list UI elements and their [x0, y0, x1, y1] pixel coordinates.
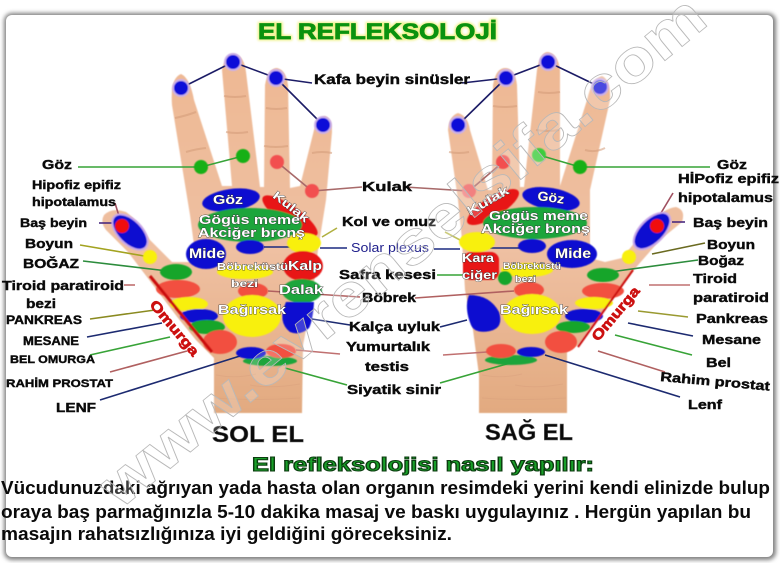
labels: left side: Tiroid paratiroid	[2, 278, 124, 293]
instructions text block: oraya baş parmağınızla 5-10 dakika masaj ve baskı uygulayınız . Hergün yapılan bu	[1, 502, 751, 522]
labels: center: Kol ve omuz	[342, 214, 437, 229]
palm zone labels: Akciğer bronş	[481, 221, 590, 236]
labels: left side: PANKREAS	[6, 313, 82, 327]
labels: center: Safra kesesi	[339, 267, 436, 282]
labels: left side: RAHİM PROSTAT	[6, 377, 113, 390]
right hand illustration	[405, 52, 710, 413]
labels: left side: BEL OMURGA	[10, 354, 95, 366]
palm zone labels: Mide	[189, 245, 225, 261]
labels: right side: Pankreas	[696, 311, 768, 326]
palm zone labels: Omurga	[147, 297, 203, 359]
labels: left side: Hipofiz epifiz	[32, 178, 121, 192]
labels: center: Yumurtalık	[346, 339, 431, 354]
labels: left side: hipotalamus	[32, 195, 116, 209]
palm zone labels: Böbreküstü	[217, 261, 288, 273]
palm zone labels: Mide	[555, 245, 591, 261]
palm zone labels: Kara	[462, 251, 494, 265]
palm zone labels: Gögüs meme	[199, 212, 300, 227]
palm zone labels	[147, 188, 324, 359]
labels: right side	[660, 157, 780, 412]
labels: center: Solar plexus	[351, 241, 429, 255]
labels: right side: paratiroid	[693, 290, 769, 305]
labels: left side: BOĞAZ	[23, 256, 79, 271]
labels: left side: MESANE	[23, 334, 79, 348]
labels: right side: HİPofiz epifiz	[678, 171, 780, 186]
labels: right side: Göz	[717, 157, 748, 172]
title: EL REFLEKSOLOJİ	[258, 19, 497, 44]
watermark: www.evrenselsifa.com	[85, 0, 719, 521]
palm zone labels: ciğer	[462, 268, 497, 282]
palm zone labels: Gögüs meme	[489, 208, 588, 223]
palm zone labels	[462, 182, 643, 344]
heading: left hand: SOL EL	[212, 421, 304, 447]
palm zone labels: Kulak	[464, 182, 512, 219]
labels: center: Kalça uyluk	[349, 319, 441, 334]
left hand illustration	[78, 53, 362, 413]
labels: left side: Baş beyin	[20, 216, 87, 230]
palm zone labels: Göz	[537, 188, 566, 207]
palm zone labels: Omurga	[588, 283, 643, 344]
labels: right side: hipotalamus	[678, 190, 773, 205]
palm zone labels: Bağırsak	[218, 302, 287, 317]
finger creases	[449, 92, 605, 400]
instructions text block: masajın rahatsızlığınıza iyi geldiğini göreceksiniz.	[1, 524, 452, 544]
palm zone labels: Bağırsak	[500, 302, 569, 317]
labels: right side: Boyun	[707, 237, 755, 252]
reflex points	[105, 53, 332, 366]
palm zone labels: Kalp	[288, 258, 322, 273]
labels: right side: Mesane	[702, 332, 761, 347]
labels: center	[314, 72, 471, 397]
labels: right side: Rahim prostat	[660, 369, 771, 394]
palm zone labels: Göz	[213, 192, 244, 207]
labels: right side: Bel	[706, 355, 731, 370]
labels: right side: Lenf	[688, 397, 723, 412]
labels: left side: LENF	[56, 400, 96, 415]
title: EL REFLEKSOLOJİ	[258, 19, 497, 44]
palm zone labels: Böbreküstü	[503, 261, 561, 272]
labels: center: Siyatik sinir	[347, 382, 441, 397]
connector lines	[78, 62, 362, 400]
labels: left side: Göz	[42, 157, 73, 172]
palm zone labels: bezi	[515, 274, 536, 285]
finger creases	[175, 96, 332, 400]
palm zone labels: Akciğer bronş	[198, 225, 305, 240]
labels: right side: Baş beyin	[693, 215, 768, 230]
labels: left side: Boyun	[25, 236, 73, 251]
labels: right side: Boğaz	[698, 253, 745, 268]
connector lines	[405, 62, 710, 397]
reflex points	[449, 53, 678, 365]
subheading: El refleksolojisi nasıl yapılır:	[252, 455, 594, 476]
labels: center: testis	[365, 359, 409, 374]
palm zone labels: Dalak	[279, 282, 324, 297]
palm zone labels: bezi	[231, 278, 258, 290]
labels: center: Kulak	[362, 179, 413, 194]
labels: left side	[2, 157, 124, 415]
heading: right hand: SAĞ EL	[485, 418, 573, 445]
labels: left side: bezi	[26, 296, 56, 311]
instructions text block: Vücudunuzdaki ağrıyan yada hasta olan organın resimdeki yerini kendi elinizde bulup	[1, 478, 770, 498]
labels: right side: Tiroid	[693, 271, 737, 286]
labels: center: Böbrek	[362, 290, 417, 305]
instructions text block	[1, 478, 770, 544]
palm zone labels: Kulak	[270, 188, 312, 225]
labels: center: Kafa beyin sinüsler	[314, 72, 471, 87]
